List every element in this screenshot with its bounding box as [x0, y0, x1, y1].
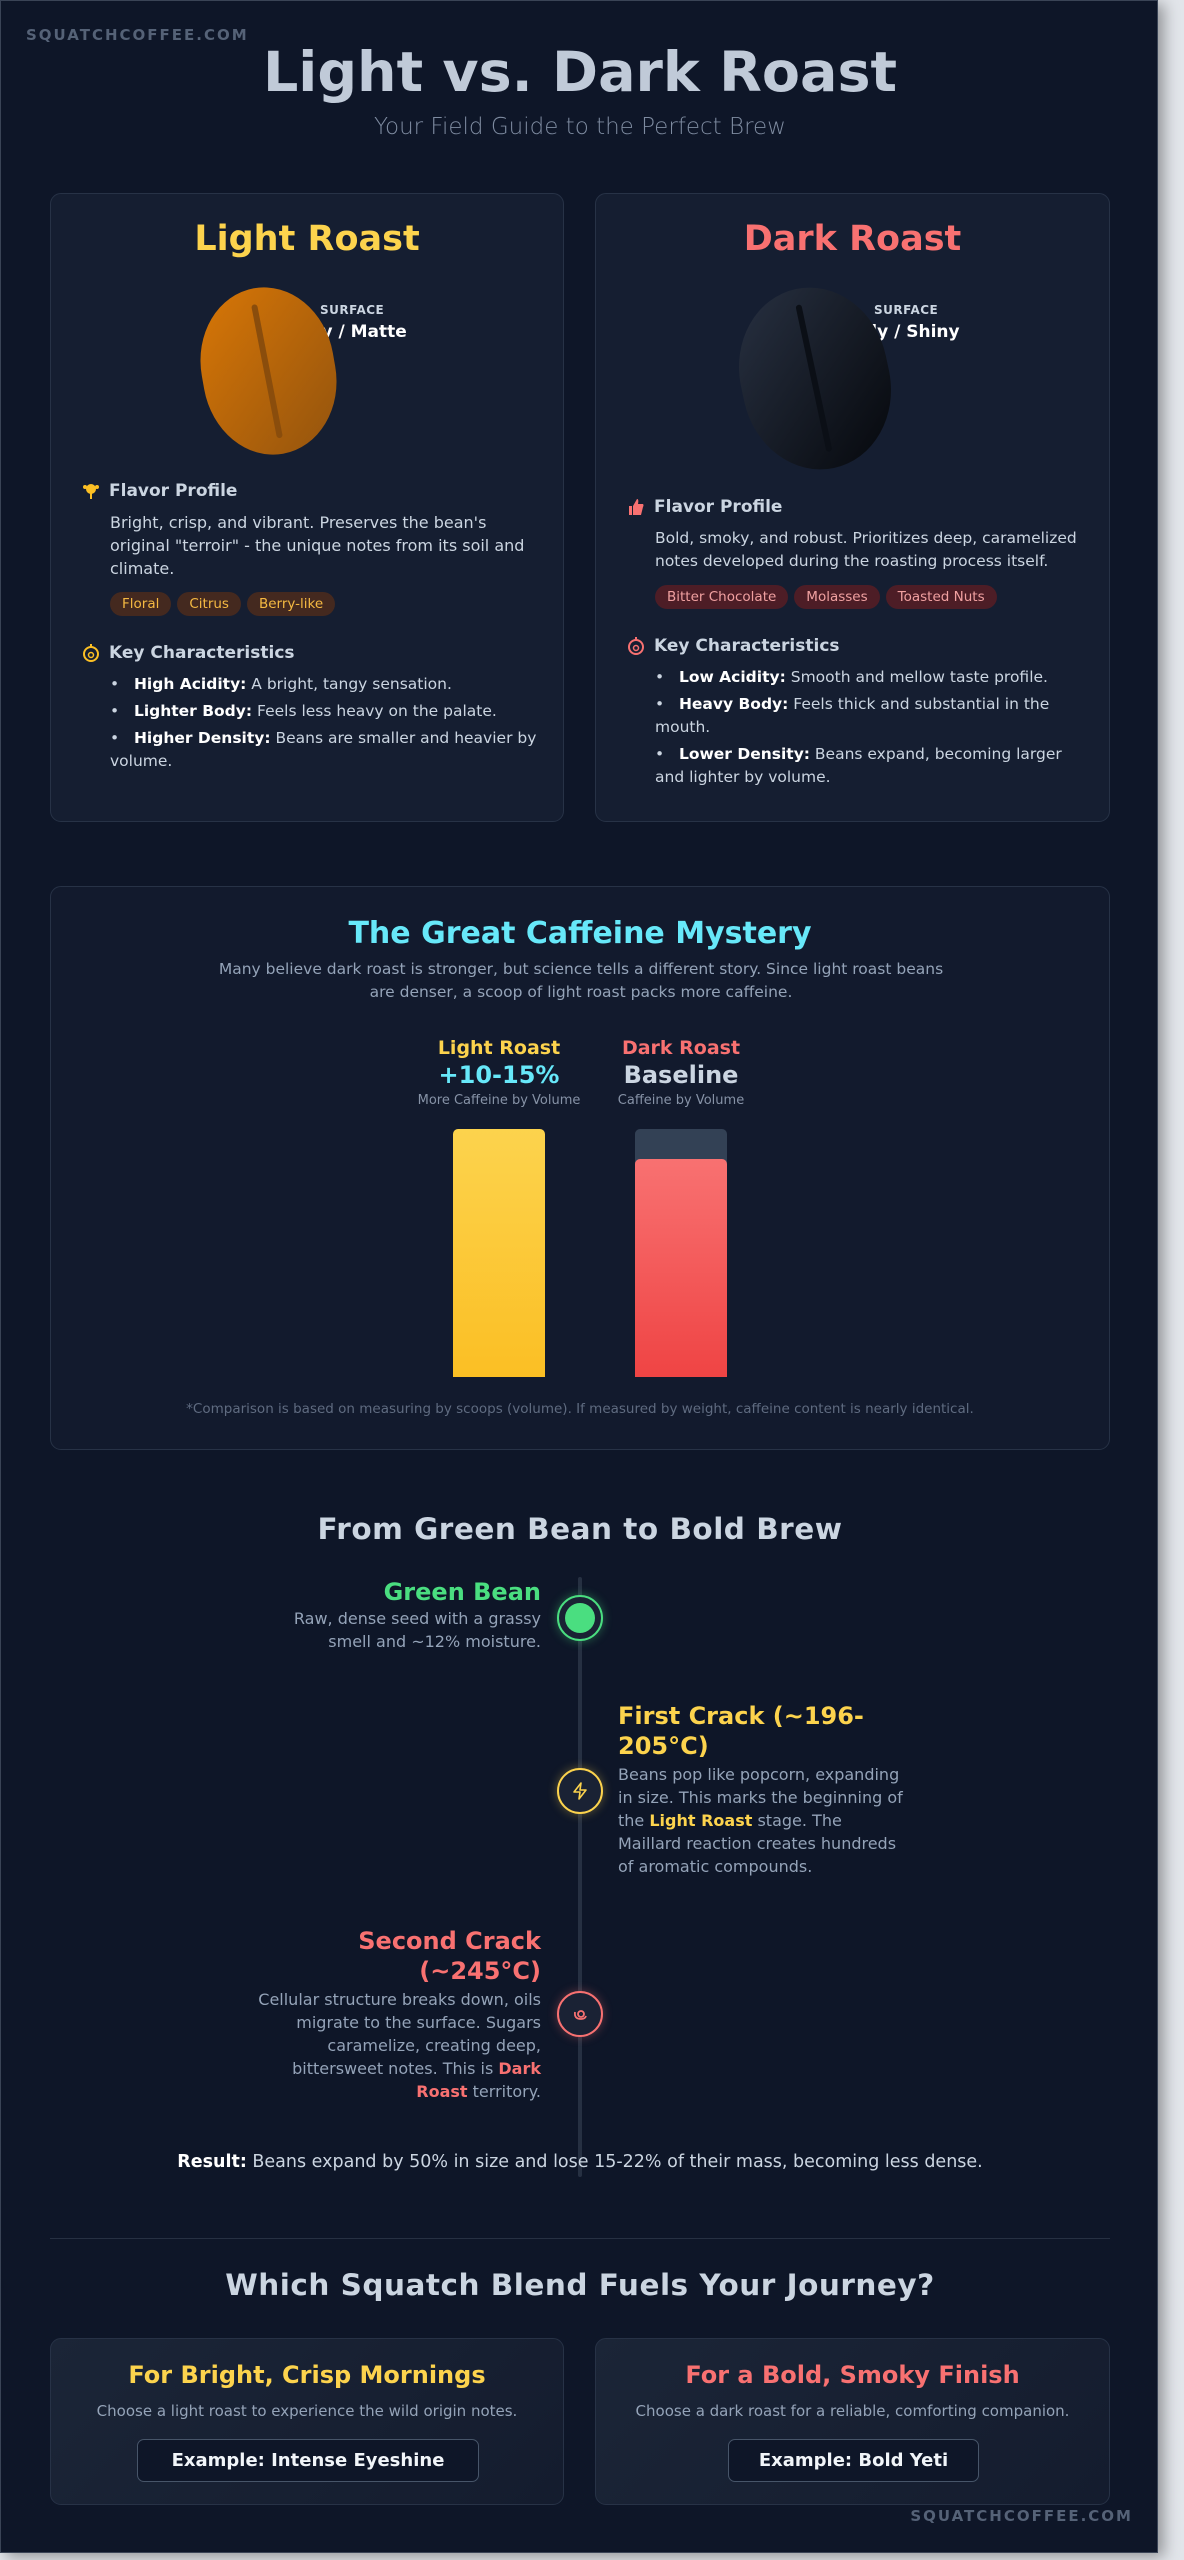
key characteristics: Key Characteristics — [109, 643, 295, 663]
flavor profile: Flavor Profile — [109, 481, 237, 501]
surface label: Dry / Matte — [299, 322, 407, 342]
flavor profile — [629, 497, 1077, 609]
panel: light blend — [50, 2338, 564, 2505]
panel: dark blend: Choose a dark roast for a reliable, comforting companion. — [636, 2402, 1069, 2420]
icon: swirl node — [557, 1991, 603, 2037]
button: dark example — [728, 2439, 979, 2482]
key characteristics — [83, 643, 536, 770]
bar: dark — [635, 1129, 727, 1377]
light label: +10-15% — [439, 1061, 559, 1089]
panel: light roast — [50, 193, 564, 822]
dark label: Dark Roast — [622, 1037, 740, 1059]
surface label: SURFACE — [874, 303, 938, 317]
heading: dark roast: Dark Roast — [744, 219, 961, 259]
key characteristics: • Lower Density: Beans expand, becoming larger and lighter by volume. — [655, 745, 1062, 786]
icon: light bean — [188, 277, 349, 465]
flavor profile: Toasted Nuts — [898, 589, 985, 605]
key characteristics: • Lighter Body: Feels less heavy on the palate. — [110, 702, 497, 720]
panel: caffeine mystery — [50, 886, 1110, 1450]
flavor profile: Floral — [122, 596, 159, 612]
heading: timeline: From Green Bean to Bold Brew — [318, 1512, 842, 1546]
dark label: Baseline — [624, 1061, 738, 1089]
surface label — [851, 303, 960, 342]
step: green bean — [294, 1578, 541, 1651]
icon: green node — [557, 1595, 603, 1641]
key characteristics: • Higher Density: Beans are smaller and heavier by volume. — [110, 729, 536, 770]
panel: dark blend: For a Bold, Smoky Finish — [685, 2361, 1020, 2389]
step: second crack: Cellular structure breaks down, oils migrate to the surface. Sugars caramelize, creating deep, bittersweet notes. This is Dark Roast territory. — [258, 1990, 541, 2101]
timeline — [258, 1577, 904, 2177]
button: dark example: Example: Bold Yeti — [759, 2450, 948, 2471]
surface label: Oily / Shiny — [851, 322, 960, 342]
step: first crack — [618, 1702, 904, 1876]
flavor profile: Molasses — [806, 589, 868, 605]
flavor profile: Berry-like — [259, 596, 323, 612]
panel: dark blend — [595, 2338, 1110, 2505]
step: green bean: Green Bean — [384, 1578, 541, 1606]
step: second crack: Second Crack (~245°C) — [358, 1927, 541, 1985]
panel: light blend: For Bright, Crisp Mornings — [128, 2361, 486, 2389]
footnote: *Comparison is based on measuring by scoops (volume). If measured by weight, caffeine content is nearly identical. — [186, 1401, 974, 1417]
key characteristics: • Low Acidity: Smooth and mellow taste profile. — [655, 668, 1048, 686]
light label — [418, 1037, 580, 1108]
flavor profile: Flavor Profile — [654, 497, 782, 517]
icon: lightning node — [557, 1768, 603, 1814]
brand top: SQUATCHCOFFEE.COM — [26, 26, 249, 44]
step: green bean: Raw, dense seed with a grassy smell and ~12% moisture. — [294, 1609, 541, 1651]
panel: light blend: Choose a light roast to experience the wild origin notes. — [97, 2402, 517, 2420]
flavor profile: Bitter Chocolate — [667, 589, 776, 605]
button: light example — [137, 2439, 479, 2482]
step: first crack: Beans pop like popcorn, expanding in size. This marks the beginning of the Light Roast stage. The Maillard reaction creates hundreds of aromatic compounds. — [618, 1765, 903, 1876]
title: Light vs. Dark Roast — [263, 40, 897, 105]
flavor profile — [83, 481, 524, 616]
flavor profile: Citrus — [189, 596, 229, 612]
flavor profile: Bold, smoky, and robust. Prioritizes deep, caramelized notes developed during the roasting process itself. — [655, 529, 1077, 570]
key characteristics: Key Characteristics — [654, 636, 840, 656]
panel: dark roast — [595, 193, 1110, 822]
key characteristics — [628, 636, 1062, 786]
flavor profile: Bright, crisp, and vibrant. Preserves the bean's original "terroir" - the unique notes from its soil and climate. — [110, 513, 524, 578]
surface label: SURFACE — [320, 303, 384, 317]
brand footer: SQUATCHCOFFEE.COM — [910, 2507, 1133, 2525]
heading: caffeine: The Great Caffeine Mystery — [348, 916, 812, 951]
result text: Result: Beans expand by 50% in size and lose 15-22% of their mass, becoming less dense. — [177, 2152, 983, 2172]
subtitle: Your Field Guide to the Perfect Brew — [374, 114, 786, 140]
description: Many believe dark roast is stronger, but science tells a different story. Since light roast beans are denser, a scoop of light roast packs more caffeine. — [219, 960, 943, 1001]
heading: blend: Which Squatch Blend Fuels Your Journey? — [225, 2268, 935, 2302]
dark label — [618, 1037, 744, 1108]
step: second crack — [258, 1927, 542, 2101]
bar chart — [418, 1037, 744, 1377]
light label: Light Roast — [438, 1037, 560, 1059]
button: light example: Example: Intense Eyeshine — [172, 2450, 444, 2471]
surface label — [299, 303, 407, 342]
dark label: Caffeine by Volume — [618, 1093, 744, 1108]
icon: dark bean — [724, 274, 906, 483]
light label: More Caffeine by Volume — [418, 1093, 580, 1108]
key characteristics: • High Acidity: A bright, tangy sensation. — [110, 675, 452, 693]
heading: light roast: Light Roast — [194, 219, 420, 259]
bar: light — [453, 1129, 545, 1377]
step: first crack: First Crack (~196-205°C) — [618, 1702, 864, 1760]
key characteristics: • Heavy Body: Feels thick and substantial in the mouth. — [655, 695, 1049, 736]
